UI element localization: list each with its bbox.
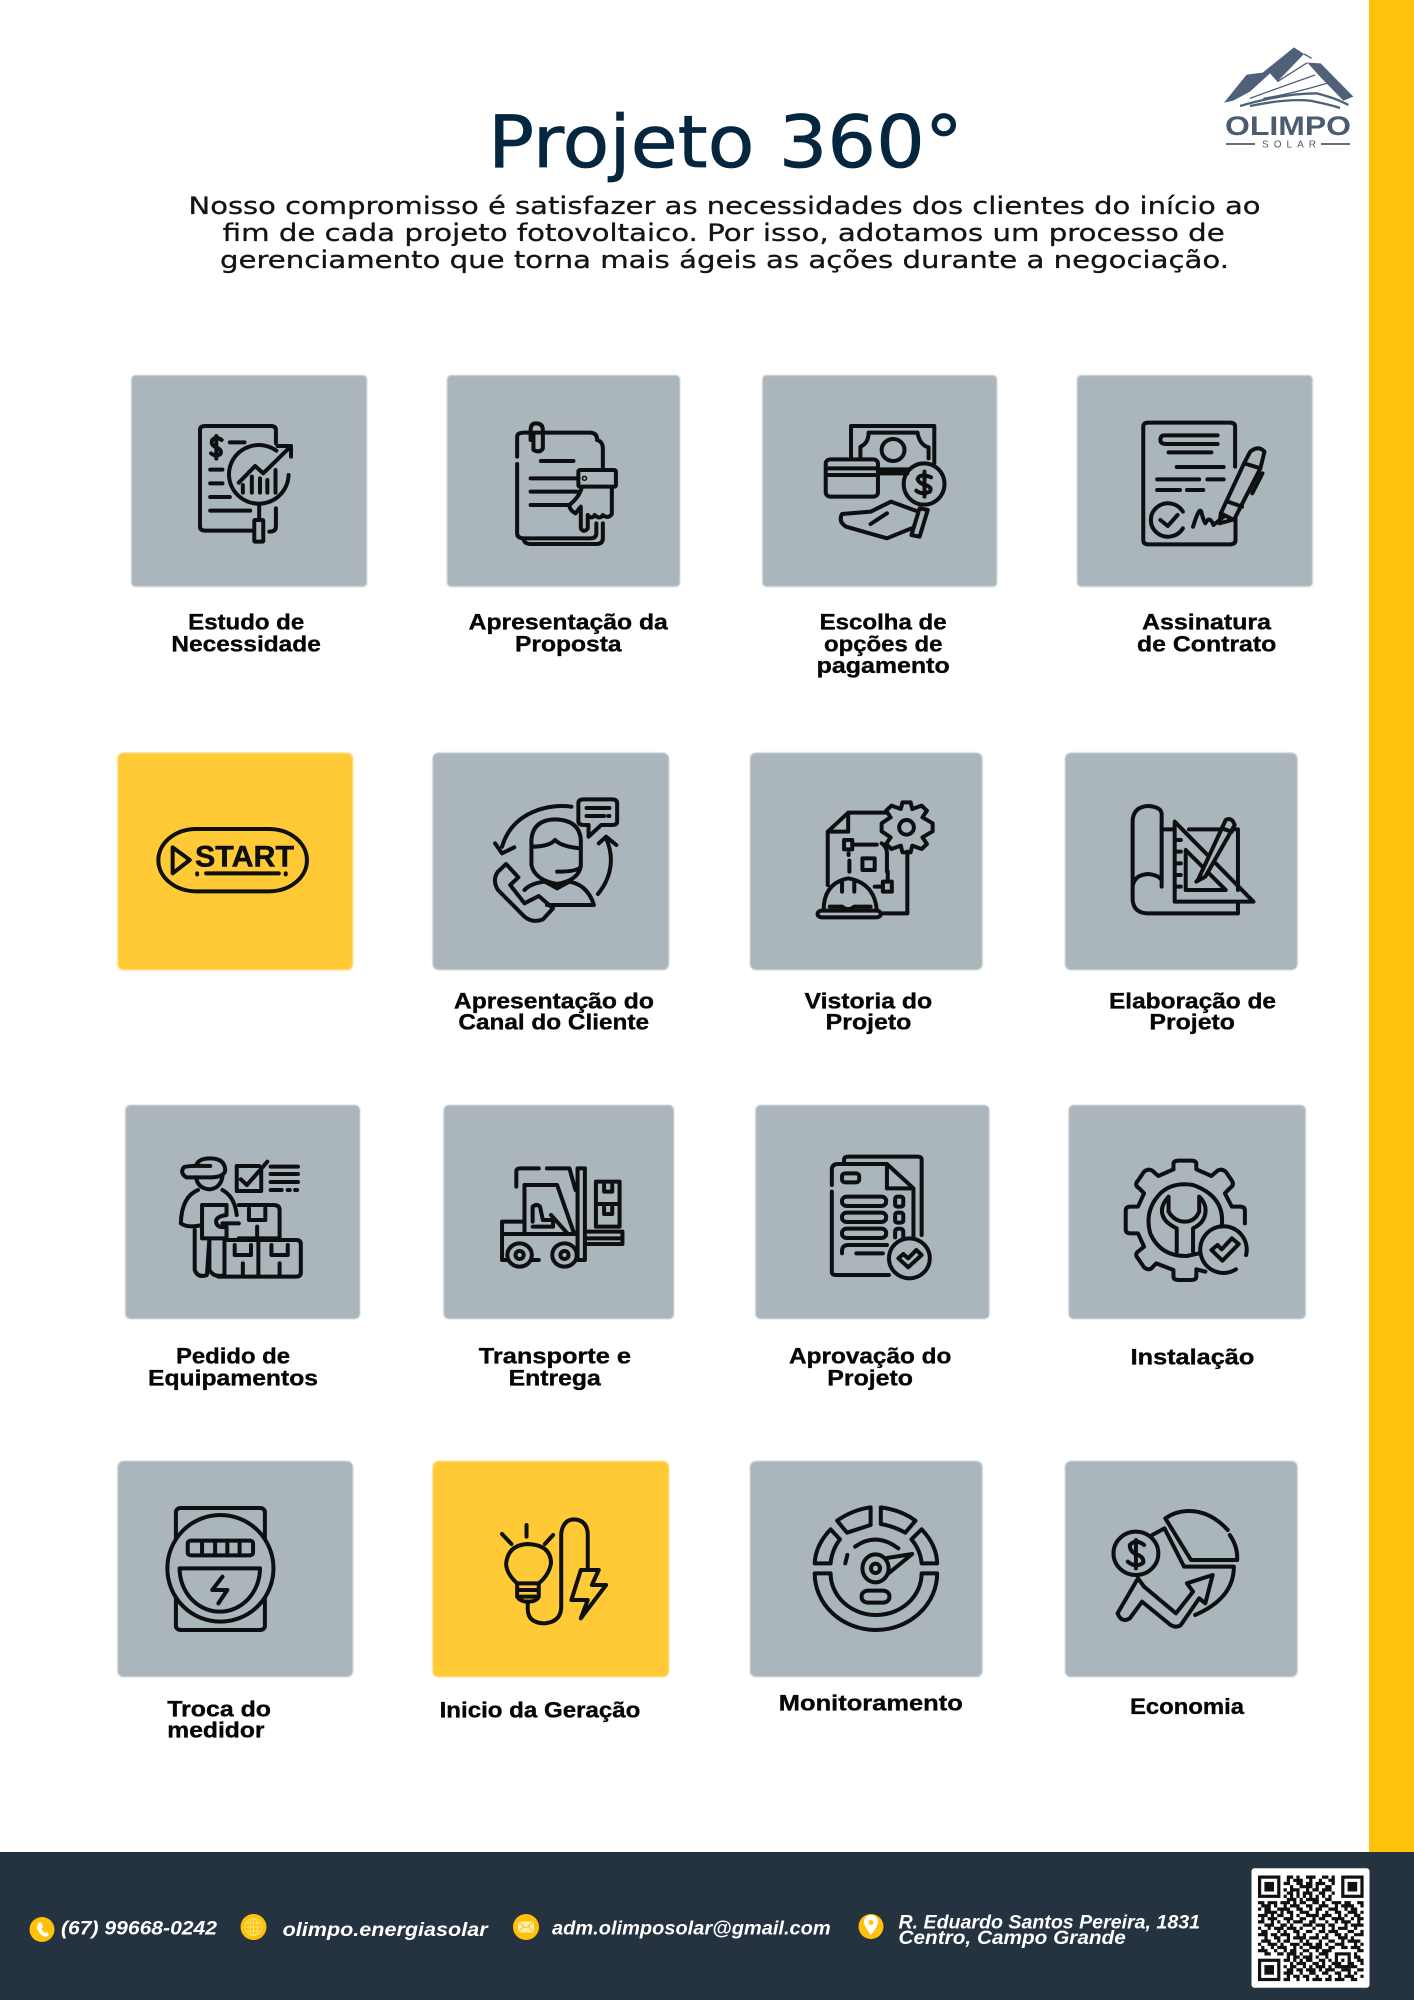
label: Aprovação do — [789, 1343, 951, 1368]
label: de Contrato — [1137, 632, 1276, 657]
logo: Olimpo Solar — [1224, 47, 1353, 150]
panel: Inicio da Geração — [433, 1461, 669, 1723]
label: Troca do — [167, 1697, 271, 1722]
label: Assinatura — [1142, 609, 1272, 634]
label: opções de — [824, 632, 942, 657]
label — [789, 1343, 951, 1391]
email contact — [513, 1914, 831, 1940]
panel: Apresentação do Canal do Cliente — [433, 753, 669, 1034]
icon: blueprint and tools — [1133, 806, 1253, 913]
panel: Transporte e Entrega — [444, 1105, 674, 1391]
icon: payment — [826, 426, 944, 538]
label: Apresentação do — [454, 988, 654, 1013]
panel: Apresentação da Proposta — [447, 375, 680, 657]
label: Monitoramento — [779, 1691, 963, 1716]
label: Projeto — [826, 1009, 911, 1034]
intro text: fim de cada projeto fotovoltaico. Por isso, adotamos um processo de — [223, 219, 1225, 247]
email contact: adm.olimposolar@gmail.com — [552, 1918, 831, 1939]
label: Proposta — [515, 632, 622, 657]
label — [454, 988, 654, 1034]
icon: savings chart — [1113, 1511, 1237, 1627]
label: Projeto — [1149, 1009, 1235, 1034]
label: Projeto — [827, 1366, 913, 1391]
label — [167, 1697, 271, 1742]
label: Economia — [1130, 1694, 1245, 1719]
icon: gauge — [815, 1507, 937, 1630]
label: Inicio da Geração — [440, 1698, 640, 1723]
footer — [0, 1852, 1414, 2000]
panel: Pedido de Equipamentos — [125, 1105, 360, 1391]
yellow side bar — [1369, 0, 1414, 1852]
label — [469, 609, 669, 657]
address contact — [858, 1912, 1200, 1949]
panel: Instalação — [1069, 1105, 1306, 1370]
intro text: gerenciamento que torna mais ágeis as ações durante a negociação. — [220, 246, 1229, 274]
panel: Assinatura de Contrato — [1077, 375, 1313, 657]
label: Apresentação da — [469, 609, 669, 634]
icon: contract signing — [1143, 423, 1264, 544]
label: Canal do Cliente — [458, 1009, 649, 1034]
icon: document with hand — [517, 423, 616, 544]
label: Elaboração de — [1109, 988, 1276, 1013]
panel: Vistoria do Projeto — [750, 753, 982, 1034]
label: Escolha de — [820, 609, 947, 634]
panel: Aprovação do Projeto — [756, 1105, 989, 1391]
label — [817, 609, 950, 678]
panel: Escolha de opções de pagamento — [762, 375, 997, 678]
label: Equipamentos — [148, 1366, 318, 1391]
icon: gear and wrench — [1126, 1161, 1247, 1280]
panel: Monitoramento — [750, 1461, 982, 1716]
address contact: R. Eduardo Santos Pereira, 1831 — [898, 1912, 1200, 1933]
panel: Estudo de Necessidade — [131, 375, 367, 657]
label — [1137, 609, 1276, 657]
logo: Olimpo Solar: SOLAR — [1262, 139, 1316, 150]
label: medidor — [167, 1717, 265, 1742]
panel: Start — [118, 753, 353, 970]
panel: Troca do medidor — [118, 1461, 353, 1742]
icon: financial analysis — [200, 426, 291, 542]
icon: bulb and lightning — [502, 1519, 606, 1623]
label: Estudo de — [188, 609, 304, 634]
website contact — [240, 1914, 489, 1941]
icon: customer support — [495, 799, 617, 921]
label: Transporte e — [479, 1343, 631, 1368]
intro text — [188, 192, 1260, 274]
label — [1109, 988, 1276, 1034]
title: Projeto 360° — [488, 100, 963, 184]
icon: start button — [158, 829, 307, 891]
logo: Olimpo Solar: OLIMPO — [1225, 111, 1351, 141]
icon: worker with boxes — [181, 1158, 301, 1277]
panel: Elaboração de Projeto — [1065, 753, 1298, 1034]
label — [148, 1343, 318, 1391]
label: Necessidade — [171, 632, 321, 657]
icon: start button: START — [195, 841, 294, 874]
label: Entrega — [509, 1366, 602, 1391]
label: pagamento — [817, 653, 950, 678]
website contact: olimpo.energiasolar — [283, 1920, 489, 1941]
icon: electricity meter — [167, 1508, 273, 1630]
phone contact — [30, 1917, 217, 1942]
panel: Economia — [1065, 1461, 1298, 1719]
label — [804, 988, 932, 1034]
icon: site inspection — [818, 802, 933, 917]
label: Pedido de — [176, 1343, 290, 1368]
label: Instalação — [1131, 1345, 1254, 1370]
icon: approved document — [832, 1157, 930, 1278]
label: Vistoria do — [804, 988, 932, 1013]
intro text: Nosso compromisso é satisfazer as necessidades dos clientes do início ao — [188, 192, 1260, 220]
address contact: Centro, Campo Grande — [898, 1928, 1126, 1949]
phone contact: (67) 99668-0242 — [61, 1919, 217, 1940]
label — [479, 1343, 631, 1391]
icon: forklift — [502, 1168, 622, 1267]
label — [171, 609, 321, 657]
QR code — [1252, 1868, 1370, 1988]
